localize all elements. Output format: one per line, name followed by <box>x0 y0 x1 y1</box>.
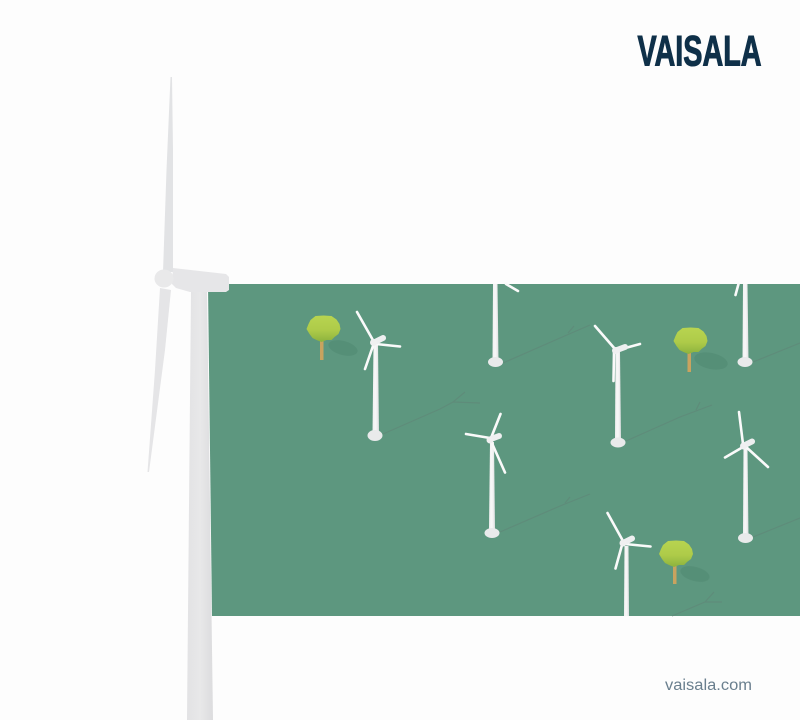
tree 2 <box>674 328 708 372</box>
nacelle <box>172 268 229 292</box>
upper blade <box>163 77 173 272</box>
panel: green field <box>208 284 800 616</box>
small turbine 1 <box>357 312 400 441</box>
hub <box>154 270 174 288</box>
lower blade <box>148 288 171 472</box>
small turbine 7, cropped at bottom <box>608 513 650 616</box>
tower <box>187 291 213 720</box>
small turbine 3 <box>595 326 640 448</box>
tree 1 <box>306 316 340 360</box>
small turbine 6 <box>725 412 768 543</box>
large foreground turbine <box>148 77 229 720</box>
ground shadows of turbines <box>383 325 800 616</box>
tree 3 <box>659 540 693 584</box>
small turbine 4, cropped at top <box>736 284 752 367</box>
website: vaisala.com: vaisala.com <box>665 677 752 694</box>
small turbine 5 <box>466 414 505 538</box>
tree shadows <box>327 337 729 585</box>
small turbine 2, cropped at top <box>488 284 518 367</box>
